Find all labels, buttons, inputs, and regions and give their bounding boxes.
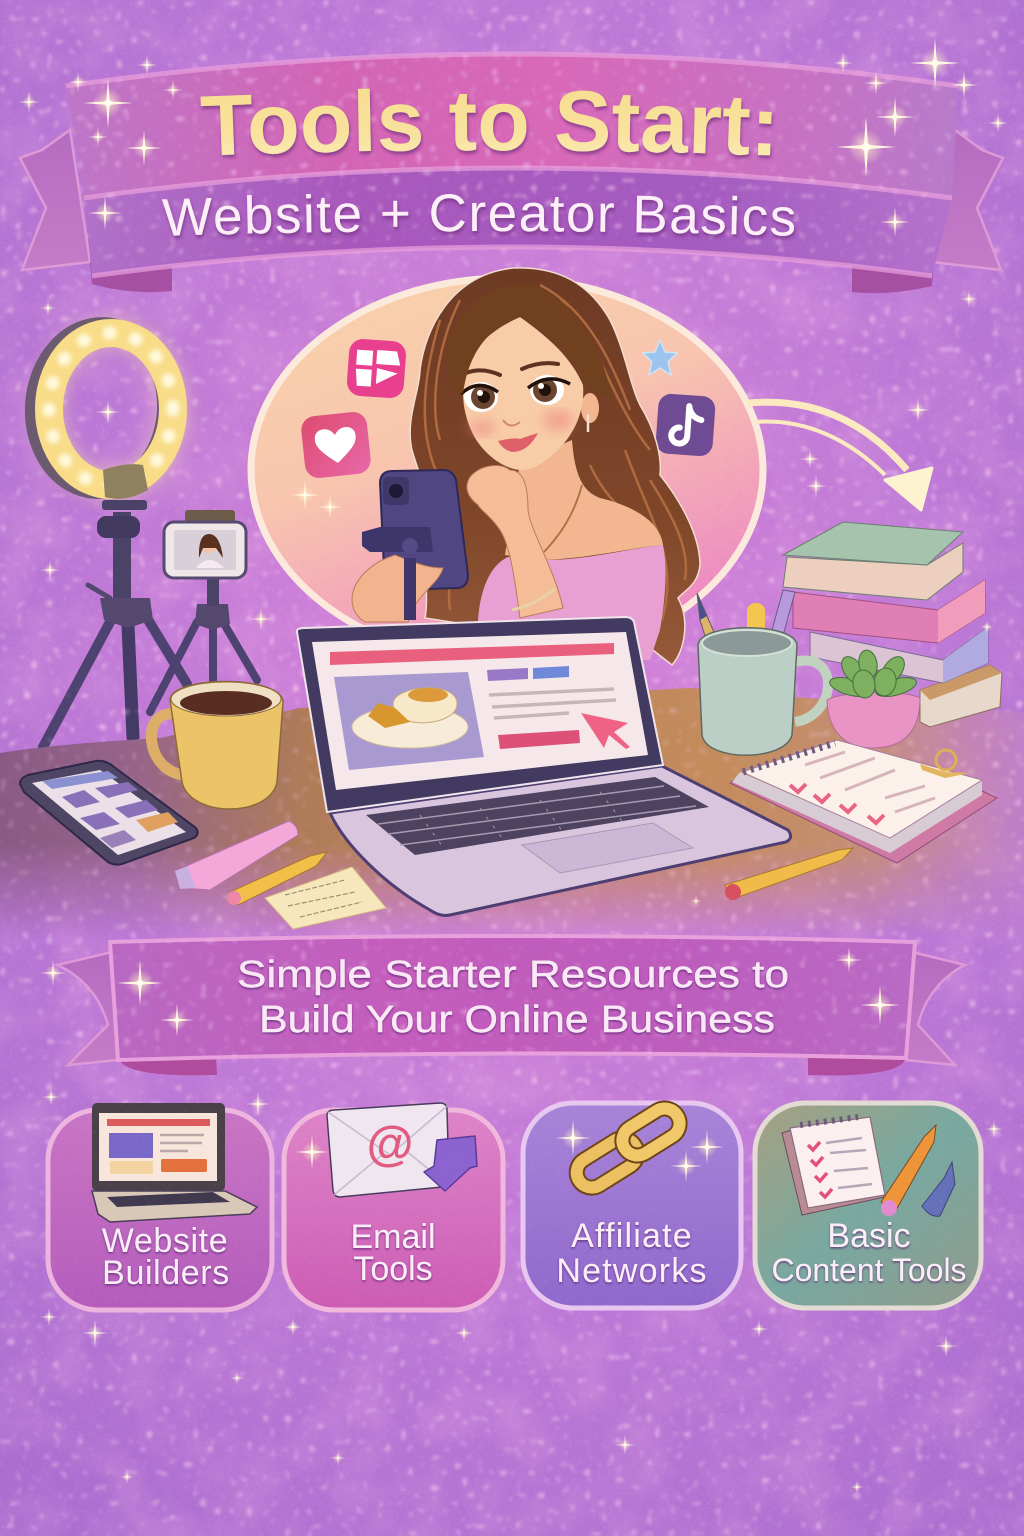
holding hand — [352, 555, 443, 622]
icon: heart tile — [300, 411, 372, 479]
card glitter — [48, 1103, 981, 1310]
woman — [410, 268, 700, 665]
ring bulbs — [49, 333, 173, 485]
lips — [498, 433, 538, 452]
icon: orange pencil — [881, 1125, 936, 1216]
front hair — [446, 285, 612, 400]
label — [350, 1218, 436, 1288]
green book — [783, 543, 963, 600]
card: basic content tools — [755, 1103, 981, 1308]
banner upper band — [66, 54, 958, 198]
right ribbon fold — [808, 1056, 906, 1075]
notebook pencil — [725, 848, 853, 900]
off-shoulder top — [478, 545, 666, 660]
necklace — [544, 485, 582, 552]
highlighter — [175, 821, 298, 890]
mug body — [698, 628, 797, 755]
subheading text line two: Build Your Online Business — [259, 999, 775, 1041]
blue tipped pen — [697, 593, 723, 658]
nose — [503, 420, 520, 426]
label: Affiliate — [571, 1217, 693, 1255]
keyboard — [366, 777, 709, 855]
ring glow — [49, 333, 173, 485]
label: Builders — [102, 1254, 230, 1292]
halo circle — [250, 278, 764, 662]
pink ticks — [790, 784, 884, 823]
blue book — [810, 627, 988, 683]
cursor — [581, 713, 630, 749]
subheading text: Simple Starter Resources to — [237, 954, 789, 996]
call to action button — [498, 730, 580, 749]
phone body — [380, 470, 468, 590]
bracelet — [512, 588, 556, 610]
icon: envelope: @ — [367, 1118, 413, 1171]
browser bar — [330, 643, 614, 665]
phone on desk — [20, 761, 198, 865]
ribbon glitter — [114, 936, 908, 1057]
page lines — [489, 689, 616, 718]
pink book — [793, 580, 985, 643]
right eye — [528, 375, 570, 405]
subtitle text: Website + Creator Basics — [162, 194, 796, 240]
label: Basic — [827, 1217, 911, 1255]
chest and neck — [505, 440, 663, 560]
trackpad — [522, 823, 693, 873]
label: Content Tools — [771, 1252, 967, 1288]
laptop — [297, 617, 791, 915]
icon: star — [643, 340, 677, 375]
display — [312, 632, 648, 790]
mount pole — [404, 558, 416, 620]
purple pen — [766, 590, 795, 654]
label — [102, 1222, 230, 1292]
spiral — [743, 743, 835, 772]
list lines — [805, 752, 935, 812]
banner outer left tail — [20, 130, 90, 270]
label: Website — [102, 1222, 228, 1260]
icon: envelope — [327, 1103, 477, 1197]
subheading banner — [57, 930, 965, 1075]
face — [463, 317, 583, 470]
banner lower left fold — [90, 262, 172, 292]
label: Email — [350, 1218, 436, 1256]
food picture — [334, 672, 484, 770]
hair strands — [425, 285, 686, 620]
icon: app tile — [346, 338, 407, 399]
arrow — [748, 402, 932, 510]
laptop screen lid — [297, 617, 663, 812]
phone camera — [383, 477, 409, 505]
hero illustration — [0, 268, 1024, 940]
banner outer right tail — [932, 130, 1003, 270]
left eye — [461, 382, 498, 412]
card: website builders — [48, 1103, 272, 1310]
card: affiliate networks — [523, 1103, 741, 1308]
cheeks — [469, 410, 573, 436]
phone mount — [362, 527, 433, 552]
left ribbon tail — [57, 952, 118, 1065]
title text: Tools to Start: — [200, 88, 774, 160]
desk — [0, 688, 1024, 940]
small tripod and phone — [150, 510, 257, 712]
mug handle — [795, 661, 828, 722]
keyboard rows — [378, 786, 696, 845]
notebook pages — [732, 772, 982, 853]
right ribbon tail — [905, 952, 965, 1065]
label: Networks — [556, 1252, 708, 1290]
yellow pencil — [227, 852, 327, 905]
hand under chin — [467, 466, 563, 618]
page buttons — [487, 668, 528, 681]
clip — [920, 764, 970, 778]
coffee mug — [151, 681, 283, 809]
ring lamp — [49, 333, 173, 485]
yellow pen — [747, 603, 765, 655]
banner lower band — [84, 168, 952, 276]
icon: laptop — [92, 1103, 257, 1222]
banner glitter — [70, 54, 956, 270]
ring mount — [103, 464, 148, 499]
earring — [587, 414, 589, 432]
big tripod — [43, 500, 187, 747]
ring light — [28, 322, 173, 499]
label — [556, 1217, 708, 1290]
icon: music tile — [655, 393, 716, 457]
icon: notebook — [782, 1117, 885, 1215]
bottom book — [920, 665, 1002, 727]
right brow — [522, 363, 558, 369]
icon: blue pencil — [922, 1162, 955, 1216]
notebook — [730, 740, 997, 863]
books — [783, 522, 1002, 727]
ear — [581, 393, 599, 423]
ribbon body — [110, 936, 915, 1060]
notebook cover — [730, 775, 997, 863]
icon: chain link — [571, 1103, 685, 1193]
card: email tools — [284, 1103, 503, 1310]
banner lower right fold — [852, 262, 934, 293]
laptop base — [330, 766, 791, 915]
sticky note — [265, 867, 386, 929]
succulent — [827, 649, 920, 748]
phone on mount — [352, 470, 468, 622]
hair — [410, 268, 700, 665]
pen mug — [697, 590, 828, 755]
ring housing — [28, 322, 172, 494]
left ribbon fold — [118, 1056, 217, 1075]
banner edge highlights — [66, 54, 958, 276]
mug rim — [702, 630, 792, 656]
label — [771, 1217, 967, 1288]
title banner — [18, 52, 1004, 294]
left brow — [466, 370, 500, 375]
label: Tools — [353, 1250, 433, 1288]
